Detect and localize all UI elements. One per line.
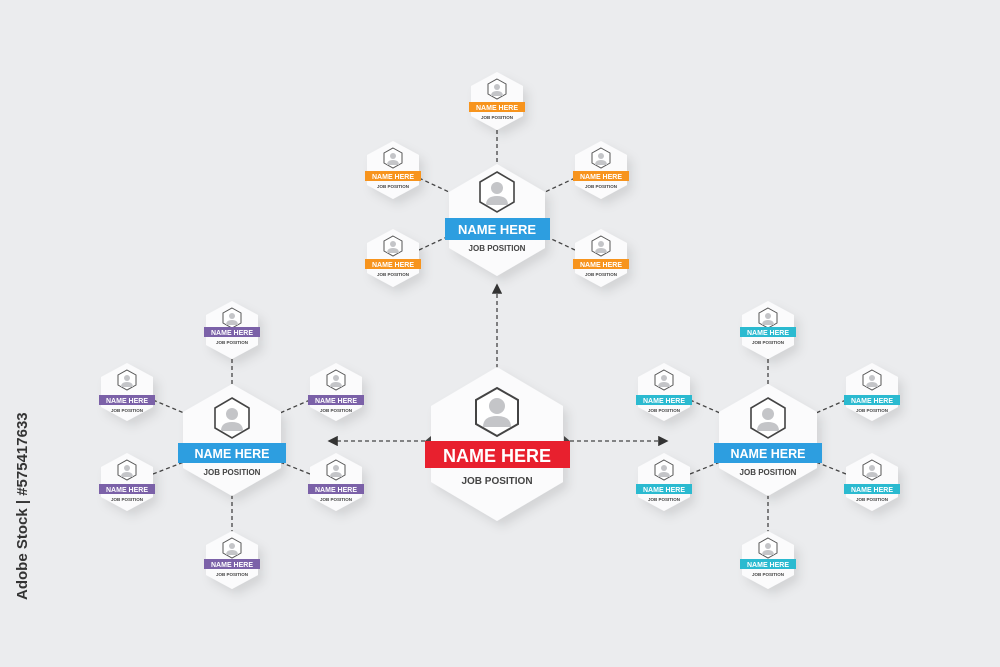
- small node teal 1: NAME HERE: [643, 398, 685, 405]
- watermark text: Adobe Stock | #575417633: [14, 412, 31, 600]
- small node purple 4: [308, 453, 364, 511]
- small node teal 1: JOB POSITION: [648, 408, 680, 413]
- small node teal 4: [844, 453, 900, 511]
- small node purple 2: JOB POSITION: [320, 408, 352, 413]
- right mid node: JOB POSITION: [740, 468, 797, 477]
- right mid node: [714, 384, 822, 496]
- small node orange 3: [365, 229, 421, 287]
- small node orange 2: [573, 141, 629, 199]
- right mid node: NAME HERE: [730, 447, 806, 461]
- small node teal 4: NAME HERE: [851, 487, 893, 494]
- small node purple 4: JOB POSITION: [320, 497, 352, 502]
- small node purple bottom: JOB POSITION: [216, 572, 248, 577]
- small node purple 3: JOB POSITION: [111, 497, 143, 502]
- small node purple top: NAME HERE: [211, 330, 253, 337]
- top mid node: NAME HERE: [458, 222, 536, 237]
- top mid node: JOB POSITION: [469, 244, 526, 253]
- small node orange top: JOB POSITION: [481, 115, 513, 120]
- small node teal bottom: JOB POSITION: [752, 572, 784, 577]
- left mid node: [178, 384, 286, 496]
- center node: [425, 367, 570, 521]
- small node teal 4: JOB POSITION: [856, 497, 888, 502]
- arrows from center: [330, 286, 666, 441]
- small node purple bottom: NAME HERE: [211, 562, 253, 569]
- small node purple 3: [99, 453, 155, 511]
- top mid node: [445, 164, 550, 276]
- small nodes: purple: [99, 301, 364, 589]
- left mid node: NAME HERE: [194, 447, 270, 461]
- small node purple 2: NAME HERE: [315, 398, 357, 405]
- small node teal top: NAME HERE: [747, 330, 789, 337]
- small node orange 2: NAME HERE: [580, 174, 622, 181]
- small node teal 2: [844, 363, 900, 421]
- center node: JOB POSITION: [461, 476, 533, 487]
- small node teal top: JOB POSITION: [752, 340, 784, 345]
- small node teal bottom: NAME HERE: [747, 562, 789, 569]
- small node purple bottom: [204, 531, 260, 589]
- small node purple top: [204, 301, 260, 359]
- small node purple 4: NAME HERE: [315, 487, 357, 494]
- small node purple top: JOB POSITION: [216, 340, 248, 345]
- small node purple 3: NAME HERE: [106, 487, 148, 494]
- connector lines: [153, 130, 846, 533]
- small nodes: orange: [365, 72, 629, 287]
- small node orange top: NAME HERE: [476, 105, 518, 112]
- small node orange 4: NAME HERE: [580, 262, 622, 269]
- small node orange 1: [365, 141, 421, 199]
- small node teal 3: NAME HERE: [643, 487, 685, 494]
- small node teal 3: [636, 453, 692, 511]
- small node teal bottom: [740, 531, 796, 589]
- small node teal 2: JOB POSITION: [856, 408, 888, 413]
- small node orange 2: JOB POSITION: [585, 184, 617, 189]
- small node orange 4: JOB POSITION: [585, 272, 617, 277]
- center node: NAME HERE: [443, 446, 551, 466]
- small node orange 3: NAME HERE: [372, 262, 414, 269]
- small node teal 1: [636, 363, 692, 421]
- small node orange top: [469, 72, 525, 130]
- small node orange 3: JOB POSITION: [377, 272, 409, 277]
- small nodes: teal: [636, 301, 900, 589]
- small node orange 4: [573, 229, 629, 287]
- small node teal top: [740, 301, 796, 359]
- small node orange 1: NAME HERE: [372, 174, 414, 181]
- small node teal 3: JOB POSITION: [648, 497, 680, 502]
- small node purple 1: [99, 363, 155, 421]
- left mid node: JOB POSITION: [204, 468, 261, 477]
- small node orange 1: JOB POSITION: [377, 184, 409, 189]
- small node purple 2: [308, 363, 364, 421]
- small node teal 2: NAME HERE: [851, 398, 893, 405]
- small node purple 1: NAME HERE: [106, 398, 148, 405]
- small node purple 1: JOB POSITION: [111, 408, 143, 413]
